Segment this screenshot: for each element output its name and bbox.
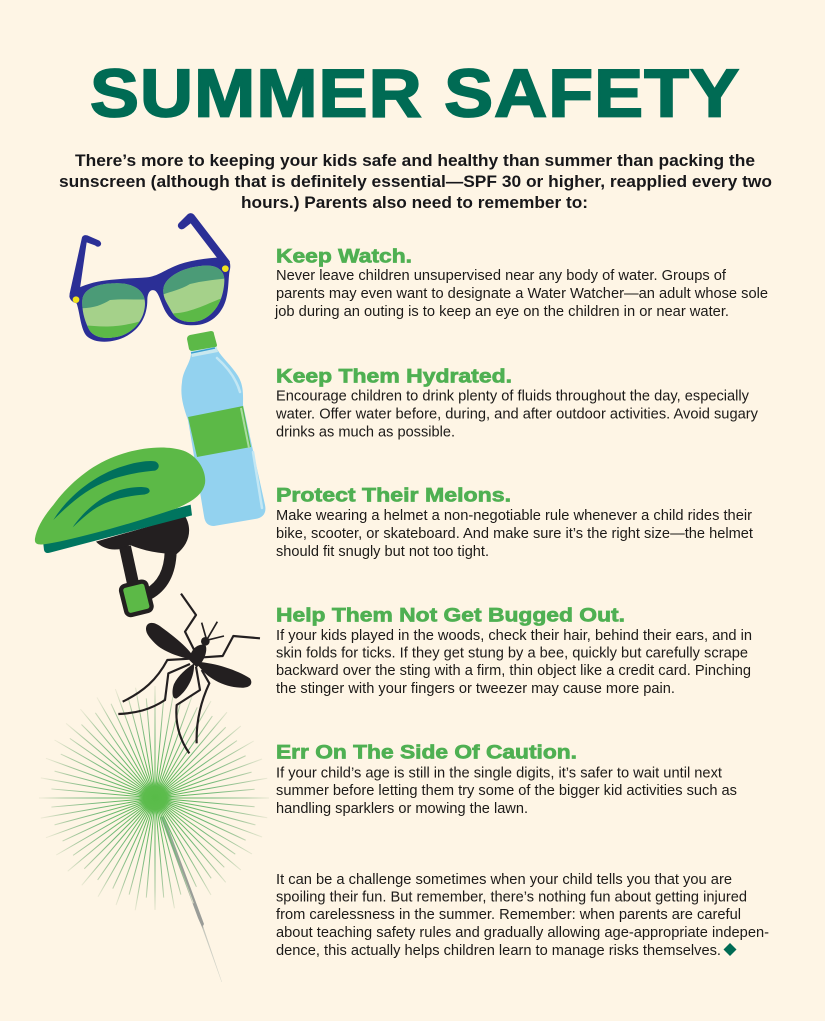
temples xyxy=(69,213,230,295)
section: keep watch xyxy=(274,246,768,320)
heading: Keep Watch. xyxy=(276,246,412,268)
closing paragraph: dence, this actually helps children learn to manage risks themselves. xyxy=(276,943,721,959)
body text: summer before letting them try some of the bigger kid activities such as xyxy=(276,783,737,799)
body text xyxy=(275,388,759,440)
icon: end mark diamond xyxy=(724,943,736,956)
body text xyxy=(276,766,737,817)
left lens xyxy=(82,283,145,338)
body text: backward over the sting with a firm, thin object like a credit card. Pinching xyxy=(276,663,751,679)
bottle highlight xyxy=(217,358,262,508)
section: help them not get bugged out xyxy=(276,606,752,697)
body text: water. Offer water before, during, and after outdoor activities. Avoid sugary xyxy=(275,406,759,422)
mosquito antennae xyxy=(202,622,224,641)
body text: the stinger with your fingers or tweezer may cause more pain. xyxy=(276,681,675,697)
section: keep them hydrated xyxy=(275,366,759,440)
body text: parents may even want to designate a Water Watcher—an adult whose sole xyxy=(276,286,768,302)
body text: Never leave children unsupervised near any body of water. Groups of xyxy=(276,268,726,284)
closing paragraph: about teaching safety rules and gradually allowing age-appropriate indepen- xyxy=(276,925,769,941)
icon: bicycle helmet xyxy=(35,447,205,616)
bottle body xyxy=(181,349,265,526)
bottle cap xyxy=(187,331,217,351)
helmet visor xyxy=(43,505,192,553)
body text: handling sparklers or mowing the lawn. xyxy=(276,801,528,817)
helmet pad xyxy=(96,516,189,554)
bottle neck xyxy=(190,344,218,357)
icon: water bottle xyxy=(181,331,265,526)
closing paragraph: It can be a challenge sometimes when your child tells you that you are xyxy=(276,872,732,888)
mosquito abdomen xyxy=(172,663,194,699)
heading: Keep Them Hydrated. xyxy=(276,366,512,388)
body text: drinks as much as possible. xyxy=(276,424,455,440)
heading: Protect Their Melons. xyxy=(276,486,511,506)
heading: Help Them Not Get Bugged Out. xyxy=(276,606,625,626)
label highlight xyxy=(241,408,249,448)
right lens xyxy=(163,266,224,322)
section: protect their melons xyxy=(276,486,753,560)
intro text xyxy=(59,151,772,212)
hinges xyxy=(73,296,79,303)
helmet buckle xyxy=(120,581,153,616)
icon: sparkler xyxy=(39,686,269,982)
title: SUMMER SAFETY xyxy=(90,55,739,131)
body text xyxy=(276,628,752,697)
bottle label xyxy=(188,406,251,457)
body text: bike, scooter, or skateboard. And make sure it’s the right size—the helmet xyxy=(276,526,753,542)
section: err on the side of caution xyxy=(276,742,737,817)
body text xyxy=(274,268,768,320)
frame xyxy=(69,257,230,342)
closing paragraph: spoiling their fun. But remember, there’s nothing fun about getting injured xyxy=(276,890,747,906)
closing paragraph: from carelessness in the summer. Remember: when parents are careful xyxy=(276,907,741,923)
body text: If your kids played in the woods, check their hair, behind their ears, and in xyxy=(276,628,752,644)
sparkler core xyxy=(138,781,172,815)
sparkler stem xyxy=(160,816,222,982)
heading: Err On The Side Of Caution. xyxy=(276,742,577,764)
body text: should fit snugly but not too tight. xyxy=(276,544,489,560)
intro text: There’s more to keeping your kids safe and healthy than summer than packing the xyxy=(75,151,755,170)
intro text: sunscreen (although that is definitely essential—SPF 30 or higher, reapplied every two xyxy=(59,172,772,191)
body text: skin folds for ticks. If they get stung by a bee, quickly but carefully scrape xyxy=(276,646,748,662)
sparkler rays xyxy=(39,686,269,910)
body text: Encourage children to drink plenty of fluids throughout the day, especially xyxy=(276,388,750,404)
mosquito thorax and head xyxy=(189,645,206,667)
body text: If your child’s age is still in the single digits, it’s safer to wait until next xyxy=(276,766,722,782)
body text: Make wearing a helmet a non-negotiable rule whenever a child rides their xyxy=(276,508,752,524)
closing paragraph xyxy=(276,872,769,959)
mosquito legs xyxy=(118,594,260,753)
mosquito wings xyxy=(146,623,193,660)
icon: sunglasses xyxy=(69,213,230,343)
helmet straps xyxy=(125,547,171,594)
intro text: hours.) Parents also need to remember to: xyxy=(241,193,588,212)
body text: job during an outing is to keep an eye on the children in or near water. xyxy=(274,304,729,320)
body text xyxy=(276,508,753,560)
helmet vents xyxy=(53,461,159,520)
helmet shell xyxy=(35,447,205,544)
icon: mosquito xyxy=(118,594,260,753)
